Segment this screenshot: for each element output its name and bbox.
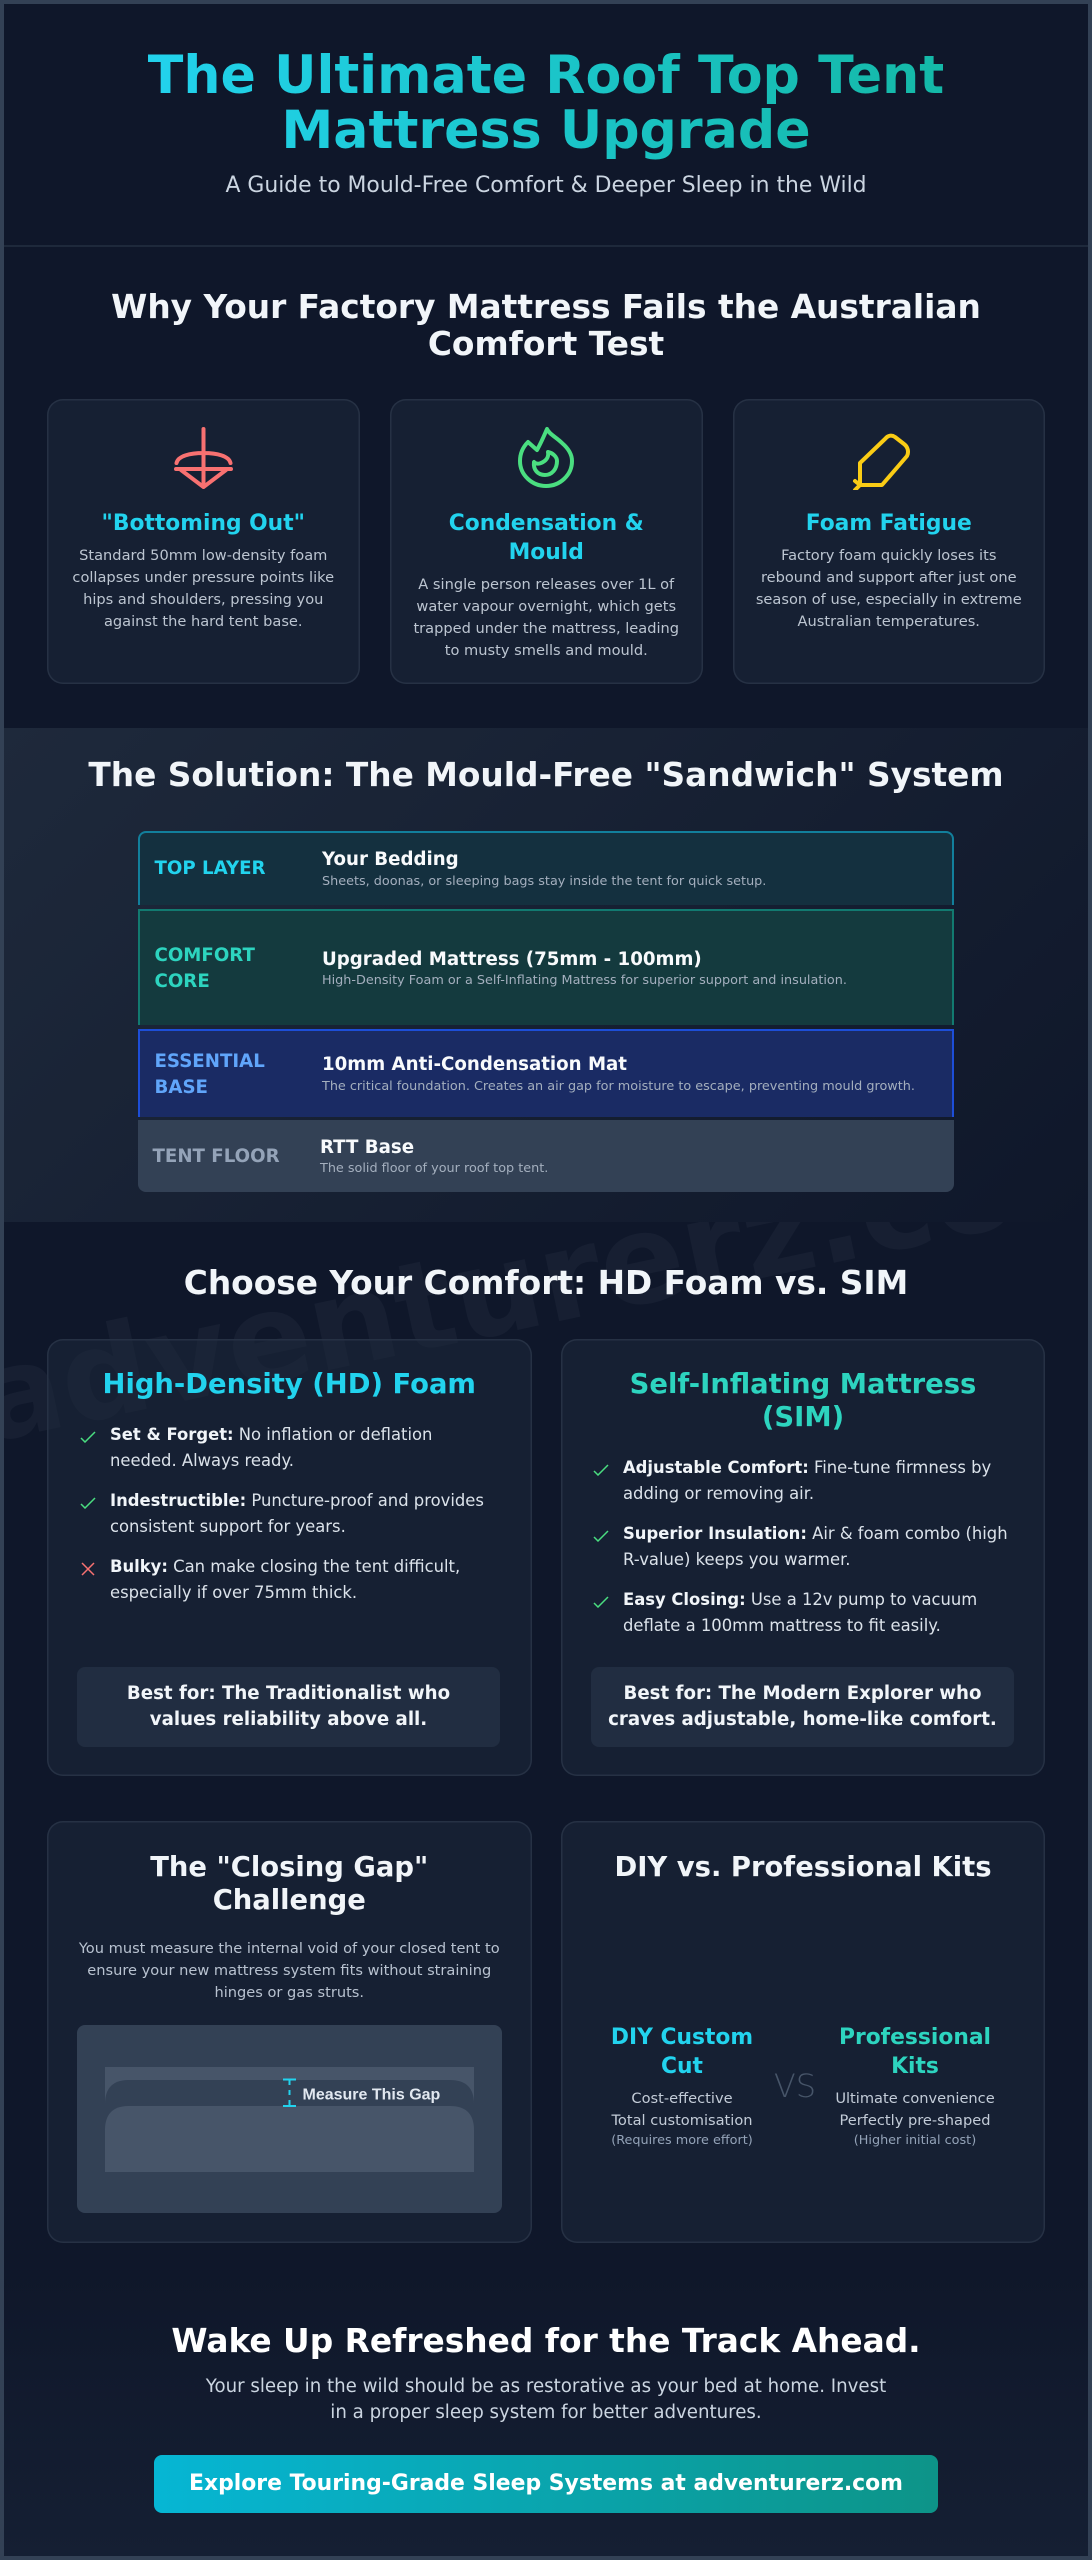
layer: top layer	[138, 831, 954, 905]
layer: tent floor	[138, 1120, 954, 1192]
card text: to musty smells and mould.	[445, 642, 648, 659]
list item: Easy Closing: Use a 12v pump to vacuum	[623, 1590, 977, 1609]
column: professional kits	[835, 2025, 995, 2148]
panel title: Challenge	[213, 1885, 366, 1916]
header	[4, 4, 1088, 247]
title: Mattress Upgrade	[281, 101, 811, 161]
panel text	[78, 1940, 500, 2001]
panel text: You must measure the internal void of your closed tent to	[79, 1940, 500, 1957]
footer text	[206, 2376, 886, 2423]
best for callout	[77, 1667, 500, 1747]
layer label	[154, 1051, 265, 1098]
best for callout	[591, 1667, 1014, 1747]
column note: (Requires more effort)	[611, 2133, 753, 2148]
list item	[623, 1458, 991, 1503]
list item: Superior Insulation: Air & foam combo (high	[623, 1524, 1008, 1543]
diagram: closing gap	[77, 2025, 502, 2213]
icon: check	[594, 1530, 608, 1542]
title: The Ultimate Roof Top Tent	[148, 46, 944, 106]
icon: check	[594, 1596, 608, 1608]
list item	[623, 1524, 1008, 1569]
panel text: hinges or gas struts.	[214, 1984, 364, 2001]
list item: deflate a 100mm mattress to fit easily.	[623, 1616, 941, 1635]
list item: adding or removing air.	[623, 1484, 814, 1503]
best for callout: Best for: The Traditionalist who	[127, 1683, 450, 1704]
section heading: choose your comfort: Choose Your Comfort: HD Foam vs. SIM	[184, 1264, 908, 1302]
layer label: COMFORT	[154, 945, 255, 966]
card title	[449, 511, 644, 565]
icon: flame	[518, 426, 574, 488]
list item: Adjustable Comfort: Fine-tune firmness by	[623, 1458, 991, 1477]
layer title: RTT Base	[320, 1137, 414, 1158]
column: DIY custom cut	[611, 2025, 753, 2148]
VS text: VS	[774, 2067, 816, 2105]
panel: HD foam	[47, 1339, 532, 1776]
panel: closing gap	[47, 1821, 532, 2243]
column text: Cost-effective	[631, 2090, 733, 2107]
column text	[835, 2090, 995, 2129]
column title: DIY Custom	[611, 2025, 753, 2050]
layer label	[154, 945, 255, 992]
list item: Set & Forget: No inflation or deflation	[110, 1425, 432, 1444]
column title: Cut	[661, 2054, 703, 2079]
layer description: Sheets, doonas, or sleeping bags stay inside the tent for quick setup.	[322, 874, 766, 889]
column text: Ultimate convenience	[835, 2090, 995, 2107]
icon: worn foam	[852, 434, 910, 490]
panel: DIY vs professional kits	[561, 1821, 1045, 2243]
list item	[623, 1590, 977, 1635]
card text: A single person releases over 1L of	[418, 576, 674, 593]
layer description: High-Density Foam or a Self-Inflating Mattress for superior support and insulation.	[322, 973, 847, 988]
icon: check	[80, 1498, 96, 1509]
card text: collapses under pressure points like	[72, 569, 334, 586]
list item	[110, 1491, 484, 1536]
subtitle: A Guide to Mould-Free Comfort & Deeper Sleep in the Wild	[225, 173, 867, 198]
card text	[413, 576, 679, 659]
layer title: Upgraded Mattress (75mm - 100mm)	[322, 949, 702, 970]
list item	[110, 1425, 432, 1470]
column title: Professional	[839, 2025, 991, 2050]
panel: foam fatigue	[732, 399, 1045, 684]
footer heading: Wake Up Refreshed for the Track Ahead.	[171, 2322, 921, 2360]
card title: "Bottoming Out"	[102, 511, 305, 536]
panel: solution section	[4, 728, 1088, 1222]
list item: Indestructible: Puncture-proof and provides	[110, 1491, 484, 1510]
column note: (Higher initial cost)	[854, 2133, 976, 2148]
card text: trapped under the mattress, leading	[413, 620, 679, 637]
column text	[611, 2090, 753, 2129]
layer description: The solid floor of your roof top tent.	[320, 1161, 548, 1176]
section heading: why factory mattress fails	[111, 288, 981, 363]
panel title: High-Density (HD) Foam	[103, 1369, 476, 1400]
card text: hips and shoulders, pressing you	[83, 591, 323, 608]
list item: consistent support for years.	[110, 1517, 346, 1536]
card text	[72, 547, 334, 630]
best for callout: Best for: The Modern Explorer who	[623, 1683, 982, 1704]
panel: bottoming out	[47, 399, 360, 684]
layer: essential base	[138, 1029, 954, 1117]
panel title	[630, 1369, 976, 1433]
list item: especially if over 75mm thick.	[110, 1583, 357, 1602]
layer label: BASE	[154, 1077, 208, 1098]
layer label: ESSENTIAL	[154, 1051, 265, 1072]
column title	[611, 2025, 753, 2079]
panel: condensation and mould	[390, 399, 702, 684]
icon: check	[594, 1464, 608, 1476]
panel title	[150, 1852, 428, 1916]
list item: R-value) keeps you warmer.	[623, 1550, 851, 1569]
card text: Standard 50mm low-density foam	[79, 547, 327, 564]
panel title: DIY vs. Professional Kits	[614, 1852, 992, 1883]
best for callout: craves adjustable, home-like comfort.	[608, 1709, 997, 1730]
list item: needed. Always ready.	[110, 1451, 294, 1470]
icon: check	[80, 1432, 96, 1443]
panel title: Self-Inflating Mattress	[630, 1369, 976, 1400]
panel title: (SIM)	[762, 1402, 844, 1433]
footer section	[4, 2270, 1088, 2556]
icon: cross	[82, 1562, 94, 1576]
call to action button: Explore Touring-Grade Sleep Systems at adventurerz.com	[189, 2471, 903, 2496]
call to action button	[154, 2455, 938, 2513]
card title: Condensation &	[449, 511, 644, 536]
card title: Foam Fatigue	[806, 511, 972, 536]
list item: Bulky: Can make closing the tent difficult,	[110, 1557, 460, 1576]
icon: bottoming out	[174, 427, 233, 489]
section heading: why factory mattress fails: Comfort Test	[428, 325, 664, 363]
section heading: why factory mattress fails: Why Your Factory Mattress Fails the Australian	[111, 288, 981, 326]
column title	[839, 2025, 991, 2079]
card text: against the hard tent base.	[104, 613, 303, 630]
footer text: Your sleep in the wild should be as restorative as your bed at home. Invest	[206, 2376, 886, 2397]
list item	[110, 1557, 460, 1602]
layer title: 10mm Anti-Condensation Mat	[322, 1054, 627, 1075]
layer: comfort core	[138, 909, 954, 1025]
column text: Perfectly pre-shaped	[840, 2112, 990, 2129]
column text: Total customisation	[611, 2112, 753, 2129]
layer title: Your Bedding	[322, 849, 459, 870]
title	[134, 48, 958, 160]
layer description: The critical foundation. Creates an air gap for moisture to escape, preventing mould growth.	[322, 1079, 915, 1094]
card text: Factory foam quickly loses its	[781, 547, 996, 564]
card text: rebound and support after just one	[761, 569, 1017, 586]
layer label: TENT FLOOR	[152, 1146, 280, 1167]
card text: Australian temperatures.	[798, 613, 980, 630]
card text: season of use, especially in extreme	[756, 591, 1022, 608]
panel title: The "Closing Gap"	[150, 1852, 428, 1883]
panel: self-inflating mattress	[561, 1339, 1045, 1776]
card text: water vapour overnight, which gets	[416, 598, 676, 615]
card title: Mould	[509, 540, 584, 565]
card text	[756, 547, 1022, 630]
footer text: in a proper sleep system for better adventures.	[330, 2402, 762, 2423]
layer label: TOP LAYER	[154, 858, 266, 879]
layer label: CORE	[154, 971, 210, 992]
section heading: solution: The Solution: The Mould-Free "Sandwich" System	[88, 756, 1004, 794]
column title: Kits	[891, 2054, 939, 2079]
best for callout: values reliability above all.	[150, 1709, 427, 1730]
diagram: closing gap: Measure This Gap	[302, 2086, 441, 2104]
panel text: ensure your new mattress system fits without straining	[87, 1962, 491, 1979]
